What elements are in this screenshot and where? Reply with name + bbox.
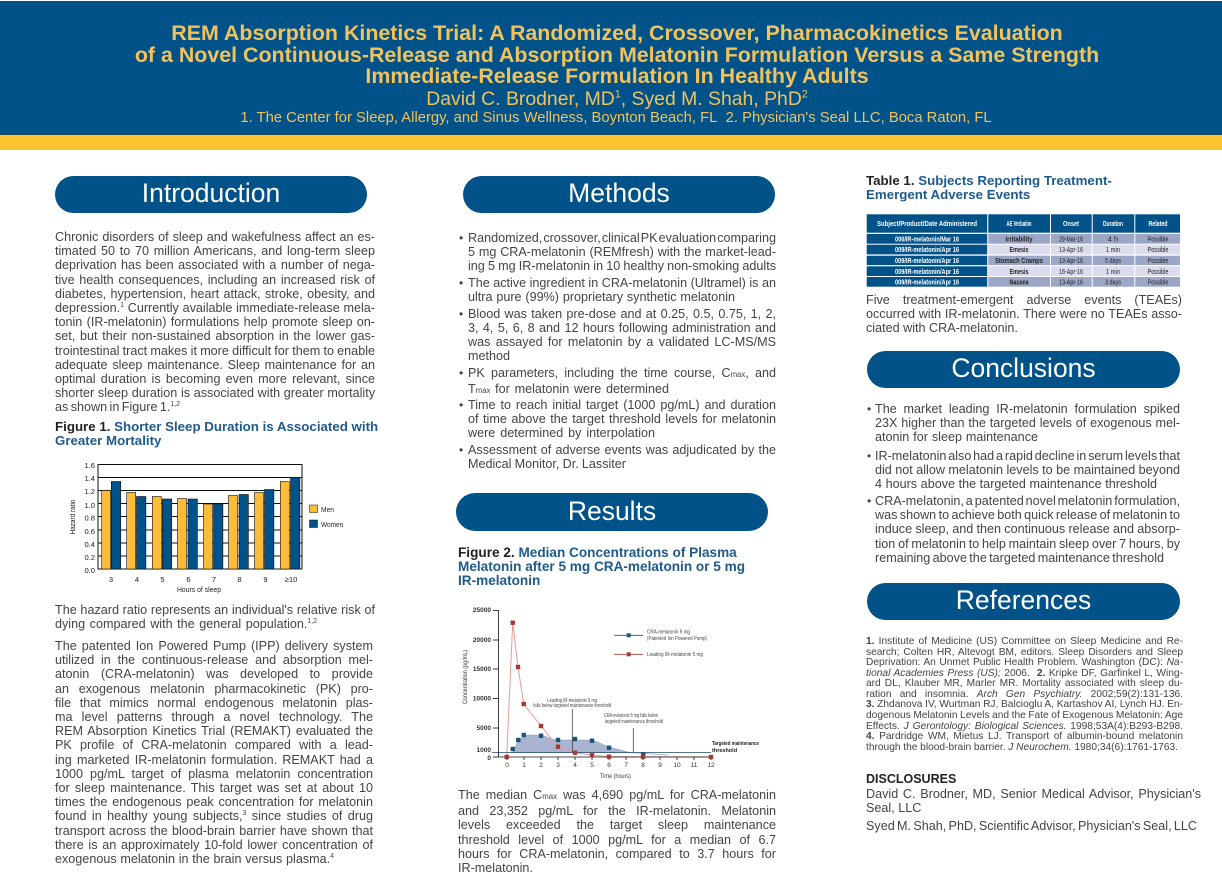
y-axis labels: 5000: [477, 725, 491, 732]
text: introduction paragraph: as shown in Figure 1.1,2: [55, 400, 180, 414]
bar chart: hazard ratio by hours of sleep: Women: [321, 520, 343, 529]
table: adverse events: 4 h: [1108, 234, 1118, 244]
text: references list: ard DL, Klauber MR, Marler MR. Mortality associated with sleep du-: [866, 678, 1183, 689]
list: methods bullets: •: [459, 230, 463, 244]
bar chart: hazard ratio by hours of sleep: Hours of sleep: [177, 585, 221, 594]
list: methods bullets: of time above the target threshold levels for melatonin: [468, 412, 776, 426]
bar chart: hazard ratio by hours of sleep: 4: [135, 575, 139, 584]
bar chart: hazard ratio by hours of sleep: 9: [263, 575, 268, 584]
x-axis labels: [505, 762, 715, 780]
line chart: plasma melatonin concentration: falls below targeted maintenance threshold: [533, 703, 611, 709]
list: methods bullets: method: [468, 349, 510, 363]
list: conclusions bullets: was shown to achieve both quick release of melatonin to: [875, 508, 1180, 522]
list: conclusions bullets: CRA-melatonin, a patented novel melatonin formulation,: [875, 494, 1180, 508]
list: methods bullets: •: [459, 276, 463, 290]
text: introduction paragraph: trointestinal tract makes it more difficult for them to enable: [55, 344, 375, 358]
line chart: plasma melatonin concentration: [462, 607, 759, 780]
list: methods bullets: •: [459, 366, 463, 380]
list: methods bullets: ing 5 mg IR-melatonin in 10 healthy non-smoking adults: [468, 259, 776, 273]
table: adverse events: 1 min: [1106, 267, 1120, 276]
authors: David C. Brodner, MD1, Syed M. Shah, PhD2: [426, 88, 808, 110]
line chart: plasma melatonin concentration: Leading IR-melatonin 5 mg: [547, 698, 597, 704]
list: methods bullets: were determined by interpolation: [468, 426, 655, 440]
text: results paragraph: threshold level of 1000 pg/mL for a median of 6.7: [458, 833, 776, 847]
heading: Methods: Methods: [568, 178, 670, 208]
IR curve: [507, 623, 711, 757]
table: adverse events: Irritability: [1006, 234, 1033, 244]
figure 1 caption: [55, 419, 378, 448]
list: methods bullets: [459, 230, 776, 471]
title: Immediate-Release Formulation In Healthy Adults: [365, 64, 869, 88]
x-axis labels: 3: [556, 762, 560, 769]
table: adverse events: 13-Apr-16: [1059, 245, 1083, 254]
text: IPP delivery paragraph: transport across the blood-brain barrier have shown that: [55, 824, 373, 838]
text: introduction paragraph: depression.1 Currently available immediate-release mela-: [55, 301, 375, 315]
line chart: plasma melatonin concentration: threshold: [712, 748, 737, 754]
text: references list: search; Colten HR, Altevogt BM, editors. Sleep Disorders and Sleep: [866, 647, 1183, 658]
bar chart: hazard ratio by hours of sleep: 7: [212, 575, 216, 584]
list: methods bullets: PK parameters, including the time course, Cmax, and: [468, 366, 776, 380]
text: introduction paragraph: tonin (IR-melatonin) formulations help promote sleep on-: [55, 315, 375, 329]
text: IPP delivery paragraph: for sleep maintenance. This target was set at about 10: [55, 781, 373, 795]
figure 2 caption: Figure 2. Median Concentrations of Plasma: [458, 545, 737, 560]
table 1 caption: Emergent Adverse Events: [866, 187, 1030, 202]
y-axis labels: [473, 607, 491, 762]
list: methods bullets: Assessment of adverse events was adjudicated by the: [468, 443, 776, 457]
figure 2 caption: IR-melatonin: [458, 573, 540, 588]
list: conclusions bullets: •: [867, 402, 871, 416]
list: methods bullets: •: [459, 398, 463, 412]
text: references list: tional Academies Press (US); 2006. 2. Kripke DF, Garfinkel L, Wing-: [866, 668, 1183, 679]
table: adverse events: Emesis: [1010, 267, 1028, 276]
text: IPP delivery paragraph: The patented Ion Powered Pump (IPP) delivery system: [55, 639, 373, 653]
x-axis labels: 11: [691, 762, 698, 769]
text: hazard ratio note: [55, 603, 375, 631]
text: TEAE summary: [866, 293, 1182, 335]
header banner: [0, 1, 1222, 150]
x-axis labels: 7: [624, 762, 628, 769]
x-axis labels: 10: [673, 762, 681, 769]
text: hazard ratio note: dying compared with the general population.1,2: [55, 617, 317, 631]
text: results paragraph: hours for CRA-melatonin, compared to 3.7 hours for: [458, 847, 776, 861]
text: references list: 4. Pardridge WM, Mietus LJ. Transport of albumin-bound melatonin: [866, 731, 1183, 742]
table: adverse events: 3 days: [1105, 278, 1121, 286]
list: conclusions bullets: tion of melatonin to help maintain sleep over 7 hours, by: [875, 537, 1180, 551]
bar chart: hazard ratio by hours of sleep: 3: [109, 575, 113, 584]
x-axis labels: 0: [505, 762, 509, 769]
text: introduction paragraph: set, but their non-sustained absorption in the lower gas-: [55, 329, 375, 343]
bar chart: hazard ratio by hours of sleep: 1.2: [84, 487, 95, 496]
text: references list: 3. Zhdanova IV, Wurtman RJ, Balcioglu A, Kartashov AI, Lynch HJ. En-: [866, 699, 1183, 710]
text: IPP delivery paragraph: an exogenous melatonin pharmacokinetic (PK) pro-: [55, 682, 373, 696]
table: adverse events: Duration: [1103, 219, 1123, 228]
text: IPP delivery paragraph: file that mimics normal endogenous melatonin plas-: [55, 696, 373, 710]
text: IPP delivery paragraph: there is an approximately 10-fold lower concentration of: [55, 838, 373, 852]
text: results paragraph: IR-melatonin.: [458, 861, 533, 875]
list: methods bullets: Medical Monitor, Dr. Lassiter: [468, 457, 626, 471]
title: of a Novel Continuous-Release and Absorption Melatonin Formulation Versus a Same Strength: [135, 42, 1099, 66]
bar chart: hazard ratio by hours of sleep: 0.4: [84, 540, 95, 549]
heading: References: References: [956, 585, 1091, 615]
text: IPP delivery paragraph: exogenous melatonin in the brain versus plasma.4: [55, 852, 334, 866]
bar chart: hazard ratio by hours of sleep: Men: [321, 505, 334, 514]
heading: Results: Results: [568, 496, 656, 526]
line chart: plasma melatonin concentration: Concentration (pg/mL): [462, 650, 469, 704]
text: disclosures: Seal, LLC: [866, 801, 921, 815]
text: TEAE summary: occurred with IR-melatonin. There were no TEAEs asso-: [866, 307, 1182, 321]
text: IPP delivery paragraph: [55, 639, 373, 866]
list: methods bullets: Tmax for melatonin were determined: [468, 382, 669, 396]
line chart: plasma melatonin concentration: CRA-melatonin 5 mg: [647, 630, 690, 636]
text: references list: ration and insomnia. Arch Gen Psychiatry. 2002;59(2):131-136.: [866, 689, 1183, 700]
x-axis labels: 8: [641, 762, 645, 769]
list: conclusions bullets: [867, 402, 1180, 565]
heading: Results: [456, 493, 768, 531]
list: methods bullets: Time to reach initial target (1000 pg/mL) and duration: [468, 398, 776, 412]
area under CRA curve: [513, 735, 630, 752]
text: results paragraph: [458, 788, 776, 875]
line chart: plasma melatonin concentration: CRA-melatonin 5 mg falls below: [604, 713, 658, 719]
x-axis labels: 1: [522, 762, 526, 769]
list: methods bullets: Blood was taken pre-dose and at 0.25, 0.5, 0.75, 1, 2,: [468, 306, 776, 320]
heading: Methods: [463, 176, 775, 213]
text: hazard ratio note: The hazard ratio represents an individual's relative risk of: [55, 603, 375, 617]
y-axis labels: 10000: [473, 696, 491, 702]
table: adverse events: Possible: [1148, 234, 1168, 244]
bar chart: hazard ratio by hours of sleep: 5: [160, 575, 165, 584]
list: conclusions bullets: 4 hours above the targeted maintenance threshold: [875, 477, 1157, 491]
text: introduction paragraph: tive health consequences, including an increased risk of: [55, 273, 375, 287]
table: adverse events: 009/IR-melatonin/Apr 16: [895, 245, 959, 254]
header background: [0, 1, 1222, 135]
line chart: plasma melatonin concentration: Targeted maintenance: [712, 741, 759, 747]
text: introduction paragraph: timated 50 to 70 million Americans, and long-term sleep: [55, 244, 375, 258]
text: introduction paragraph: Chronic disorders of sleep and wakefulness affect an es-: [55, 230, 375, 244]
table: adverse events: 29-Mar-16: [1059, 234, 1083, 244]
text: IPP delivery paragraph: ma level patterns through a novel technology. The: [55, 710, 373, 724]
text: introduction paragraph: diabetes, hypertension, heart attack, stroke, obesity, and: [55, 287, 375, 301]
text: IPP delivery paragraph: 1000 pg/mL target of plasma melatonin concentration: [55, 767, 373, 781]
text: IPP delivery paragraph: ing marketed IR-melatonin formulation. REMAKT had a: [55, 753, 373, 767]
table: adverse events: [866, 214, 1180, 287]
text: TEAE summary: ciated with CRA-melatonin.: [866, 321, 1018, 335]
bar chart: hazard ratio by hours of sleep: 0.2: [84, 553, 95, 562]
bar chart: hazard ratio by hours of sleep: 0.8: [84, 514, 95, 522]
y-axis labels: 20000: [473, 637, 491, 644]
list: conclusions bullets: remaining above the targeted maintenance threshold: [875, 551, 1164, 565]
text: introduction paragraph: [55, 230, 375, 414]
text: disclosures: David C. Brodner, MD, Senior Medical Advisor, Physician's: [866, 787, 1201, 801]
chart legend: [614, 634, 643, 636]
line chart: plasma melatonin concentration: targeted maintenance threshold: [605, 719, 663, 725]
table: adverse events: Possible: [1148, 267, 1168, 276]
list: conclusions bullets: IR-melatonin also had a rapid decline in serum levels that: [875, 449, 1180, 463]
table: adverse events: 009/IR-melatonin/Apr 16: [895, 278, 959, 286]
heading: Conclusions: Conclusions: [951, 353, 1096, 383]
gold stripe: [0, 135, 1222, 150]
text: references list: through the blood-brain barrier. J Neurochem. 1980;34(6):1761-1763.: [866, 742, 1178, 753]
y-axis labels: 1000: [477, 747, 491, 754]
list: methods bullets: 3, 4, 5, 6, 8 and 12 hours following administration and: [468, 321, 776, 335]
table: adverse events: 13-Apr-16: [1059, 278, 1083, 286]
title: REM Absorption Kinetics Trial: A Randomized, Crossover, Pharmacokinetics Evaluation: [171, 21, 1063, 45]
bar chart: hazard ratio by hours of sleep: 8: [237, 575, 242, 584]
bar chart: hazard ratio by hours of sleep: 0.0: [84, 566, 95, 575]
list: conclusions bullets: did not allow melatonin levels to be maintained beyond: [875, 463, 1180, 477]
axes: [493, 610, 712, 760]
heading: Conclusions: [867, 351, 1180, 388]
figure 2 caption: Melatonin after 5 mg CRA-melatonin or 5 mg: [458, 559, 745, 574]
figure 1 caption: Greater Mortality: [55, 433, 161, 448]
table: adverse events: Possible: [1148, 256, 1168, 265]
text: disclosures: [866, 787, 1201, 833]
table: adverse events: Emesis: [1010, 245, 1028, 254]
list: conclusions bullets: induce sleep, and then continuous release and absorp-: [875, 522, 1180, 536]
heading: disclosures: DISCLOSURES: [866, 772, 956, 786]
text: results paragraph: and 23,352 pg/mL for the IR-melatonin. Melatonin: [458, 804, 776, 818]
text: results paragraph: levels exceeded the target sleep maintenance: [458, 818, 776, 832]
text: IPP delivery paragraph: times the endogenous peak concentration for melatonin: [55, 795, 373, 809]
bar chart: hazard ratio by hours of sleep: 6: [186, 575, 191, 584]
x-axis labels: 6: [607, 762, 611, 769]
table: adverse events: 009/IR-melatonin/Apr 16: [895, 256, 959, 265]
bar chart: hazard ratio by hours of sleep: ≥10: [285, 575, 297, 584]
text: IPP delivery paragraph: atonin (CRA-melatonin) was developed to provide: [55, 667, 373, 681]
annotations: [571, 709, 573, 752]
list: conclusions bullets: atonin for sleep maintenance: [875, 430, 1038, 444]
heading: Introduction: Introduction: [142, 178, 280, 208]
figure 1 caption: Figure 1. Shorter Sleep Duration is Associated with: [55, 419, 378, 434]
y-axis labels: 0: [487, 755, 491, 762]
table: adverse events: 16-Apr-16: [1059, 267, 1083, 276]
heading: References: [867, 583, 1180, 620]
list: methods bullets: was assayed for melatonin by a validated LC-MS/MS: [468, 335, 776, 349]
text: references list: dogenous Melatonin Levels and the Fate of Exogenous Melatonin: Age: [866, 710, 1183, 721]
text: IPP delivery paragraph: PK profile of CRA-melatonin compared with a lead-: [55, 738, 373, 752]
text: disclosures: Syed M. Shah, PhD, Scientific Advisor, Physician's Seal, LLC: [866, 819, 1197, 833]
table: adverse events: 13-Apr-16: [1059, 256, 1083, 265]
line chart: plasma melatonin concentration: (Patented Ion Powered Pump): [647, 636, 707, 642]
list: methods bullets: •: [459, 443, 463, 457]
text: references list: Effects. J Gerontology: Biological Sciences. 1998;53A(4):B293-B298.: [866, 720, 1183, 732]
table: adverse events: 1 min: [1106, 245, 1120, 254]
text: references list: [866, 636, 1183, 753]
text: IPP delivery paragraph: utilized in the continuous-release and absorption mel-: [55, 653, 373, 667]
list: methods bullets: •: [459, 306, 463, 320]
text: introduction paragraph: shorter sleep duration is associated with greater mortality: [55, 386, 375, 400]
list: methods bullets: The active ingredient in CRA-melatonin (Ultramel) is an: [468, 276, 776, 290]
text: references list: 1. Institute of Medicine (US) Committee on Sleep Medicine and Re-: [866, 636, 1183, 647]
list: conclusions bullets: The market leading IR-melatonin formulation spiked: [875, 402, 1180, 416]
text: introduction paragraph: adequate sleep maintenance. Sleep maintenance for an: [55, 358, 375, 372]
table: adverse events: Possible: [1148, 245, 1168, 254]
y-axis labels: 25000: [473, 607, 491, 614]
table: adverse events: Nausea: [1010, 278, 1029, 286]
affiliations: 1. The Center for Sleep, Allergy, and Sinus Wellness, Boynton Beach, FL 2. Physician's Seal LLC, Boca Raton, FL: [240, 110, 992, 126]
x-axis labels: 9: [658, 762, 662, 769]
y-axis labels: 15000: [473, 666, 491, 673]
list: conclusions bullets: 23X higher than the targeted levels of exogenous mel-: [875, 416, 1180, 430]
text: introduction paragraph: optimal duration is becoming even more relevant, since: [55, 372, 375, 386]
IR markers: [505, 621, 713, 759]
table: adverse events: Stomach Cramps: [995, 256, 1043, 265]
bar chart: hazard ratio by hours of sleep: 1.6: [84, 461, 95, 470]
table: adverse events: Related: [1148, 219, 1168, 228]
table: adverse events: Subject/Product/Date Administered: [877, 219, 977, 228]
table 1 caption: Table 1. Subjects Reporting Treatment-: [866, 173, 1112, 188]
bar chart: hazard ratio by hours of sleep: [68, 461, 343, 594]
table: adverse events: 5 days: [1105, 256, 1121, 265]
text: results paragraph: The median Cmax was 4,690 pg/mL for CRA-melatonin: [458, 788, 776, 802]
table: adverse events: AE Verbatim: [1006, 219, 1032, 228]
text: introduction paragraph: deprivation has been associated with a number of nega-: [55, 258, 375, 272]
x-axis labels: 2: [539, 762, 543, 769]
line chart: plasma melatonin concentration: Leading IR-melatonin 5 mg: [647, 652, 703, 658]
table: adverse events: Possible: [1148, 278, 1168, 286]
x-axis labels: Time (hours): [600, 773, 631, 780]
CRA markers: [511, 733, 645, 756]
table: adverse events: 006/IR-melatonin/Mar 16: [895, 234, 959, 244]
list: conclusions bullets: •: [867, 494, 871, 508]
text: IPP delivery paragraph: found in healthy young subjects,3 since studies of drug: [55, 809, 373, 823]
x-axis labels: 12: [707, 762, 715, 769]
table: adverse events: 009/IR-melatonin/Apr 16: [895, 267, 959, 276]
bar chart: hazard ratio by hours of sleep: 0.6: [84, 527, 95, 536]
title: [135, 21, 1099, 88]
text: IPP delivery paragraph: REM Absorption Kinetics Trial (REMAKT) evaluated the: [55, 724, 373, 738]
text: references list: Deprivation: An Unmet Public Health Problem. Washington (DC): Na-: [866, 657, 1183, 668]
table 1 caption: [866, 173, 1112, 202]
bar chart: hazard ratio by hours of sleep: Hazard ratio: [68, 500, 77, 534]
bar chart: hazard ratio by hours of sleep: 1.0: [84, 501, 95, 510]
list: conclusions bullets: •: [867, 449, 871, 463]
list: methods bullets: ultra pure (99%) proprietary synthetic melatonin: [468, 290, 735, 304]
x-axis labels: 4: [573, 762, 577, 769]
list: methods bullets: Randomized, crossover, clinical PK evaluation comparing: [468, 230, 776, 244]
bar chart: hazard ratio by hours of sleep: 1.4: [84, 474, 95, 483]
table: adverse events: Onset: [1063, 219, 1079, 228]
list: methods bullets: 5 mg CRA-melatonin (REMfresh) with the market-lead-: [468, 245, 776, 259]
text: TEAE summary: Five treatment-emergent adverse events (TEAEs): [866, 293, 1182, 307]
heading: Introduction: [55, 176, 367, 213]
figure 2 caption: [458, 545, 745, 588]
x-axis labels: 5: [590, 762, 594, 769]
threshold line: [492, 752, 711, 754]
